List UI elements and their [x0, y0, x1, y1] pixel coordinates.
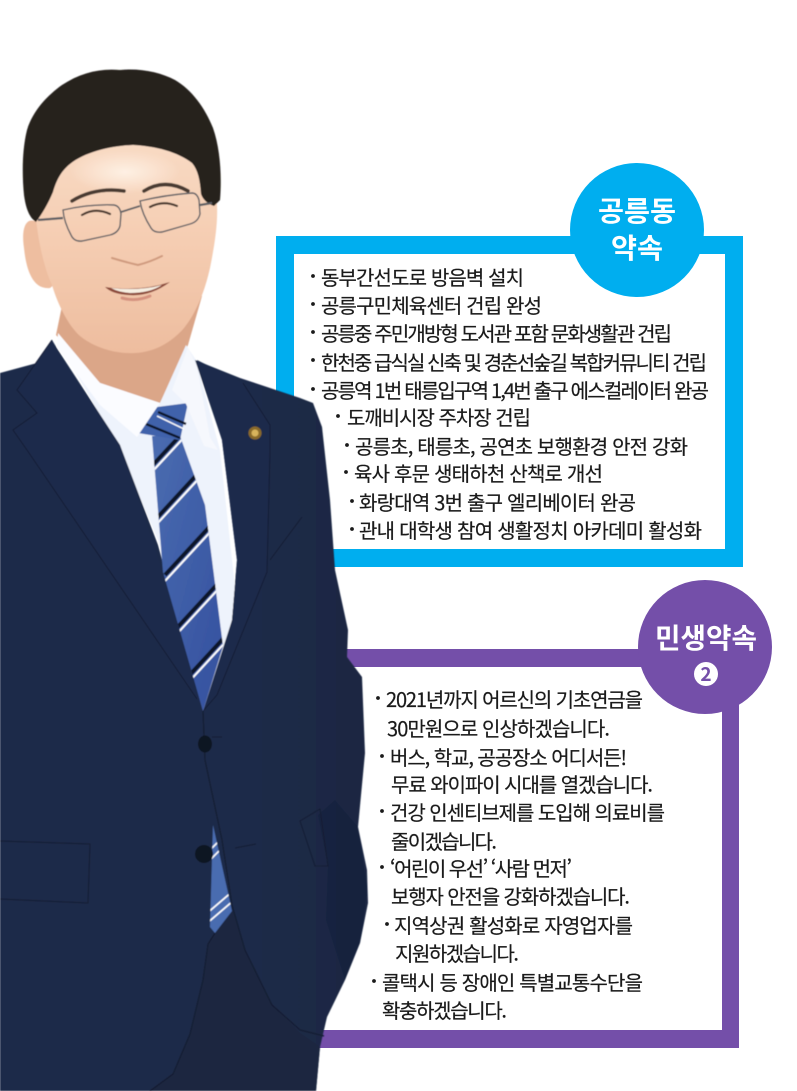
left ear	[23, 220, 60, 288]
lapel pin	[248, 426, 262, 440]
shirt	[60, 345, 237, 711]
forehead highlight	[70, 150, 180, 194]
text block: 공릉동 약속 list	[311, 262, 709, 544]
text block: 민생약속 list: ‘어린이 우선’ ‘사람 먼저’	[390, 853, 572, 882]
text block: 민생약속 list: 콜택시 등 장애인 특별교통수단을	[382, 967, 643, 996]
heading: 민생약속 2	[655, 617, 757, 687]
panel: blue frame	[276, 236, 743, 567]
text block: 민생약속 list: 확충하겠습니다.	[382, 995, 507, 1024]
heading: 공릉동 약속	[598, 190, 676, 267]
trousers	[150, 905, 320, 1091]
eyes	[82, 203, 177, 215]
shirt collar right	[172, 347, 218, 450]
text block: 공릉동 약속 list: 공릉구민체육센터 건립 완성	[321, 290, 542, 319]
text block: 공릉동 약속 list: 화랑대역 3번 출구 엘리베이터 완공	[359, 487, 636, 516]
text block: 공릉동 약속 list: 동부간선도로 방음벽 설치	[321, 262, 524, 291]
tie lower	[209, 826, 233, 934]
badge circle: 공릉동 약속	[570, 163, 704, 297]
mouth	[105, 282, 170, 300]
jacket buttons	[195, 736, 213, 863]
eyebrows	[72, 184, 188, 201]
heading: 공릉동 약속: 공릉동	[598, 190, 676, 230]
text block: 공릉동 약속 list: 도깨비시장 주차장 건립	[347, 402, 531, 431]
text block: 민생약속 list	[372, 684, 665, 1024]
left lapel	[13, 340, 203, 711]
text block: 공릉동 약속 list: 한천중 급식실 신축 및 경춘선숲길 복합커뮤니티 건립	[321, 347, 707, 376]
panel: purple frame	[310, 649, 739, 1048]
text block: 민생약속 list: 지원하겠습니다.	[395, 938, 519, 967]
suit jacket body	[0, 340, 368, 1091]
tie upper	[152, 435, 224, 711]
text block: 민생약속 list: 30만원으로 인상하겠습니다.	[387, 713, 610, 742]
text block: 민생약속 list: 보행자 안전을 강화하겠습니다.	[391, 881, 630, 910]
text block: 민생약속 list: 지역상권 활성화로 자영업자를	[394, 910, 633, 939]
text block: 민생약속 list: 무료 와이파이 시대를 열겠습니다.	[391, 769, 653, 798]
heading: 민생약속 2: 민생약속	[655, 617, 757, 657]
arm gap shadow	[318, 800, 367, 980]
text block: 공릉동 약속 list: 공릉초, 태릉초, 공연초 보행환경 안전 강화	[355, 431, 688, 460]
neck	[56, 296, 202, 403]
hair	[23, 69, 221, 222]
glasses	[38, 193, 212, 241]
text block: 공릉동 약속 list: 공릉역 1번 태릉입구역 1,4번 출구 에스컬레이터 완공	[321, 375, 709, 404]
jacket hem line	[150, 711, 324, 1091]
shirt collar left	[57, 333, 160, 437]
suit seams and pockets	[0, 517, 328, 903]
text block: 민생약속 list: 줄이겠습니다.	[391, 826, 497, 855]
portrait: man in navy suit	[0, 69, 368, 1091]
text block: 민생약속 list: 버스, 학교, 공공장소 어디서든!	[390, 742, 627, 771]
nose shadow	[112, 256, 162, 265]
text block: 공릉동 약속 list: 공릉중 주민개방형 도서관 포함 문화생활관 건립	[321, 318, 672, 347]
heading: 공릉동 약속: 약속	[611, 227, 663, 267]
text block: 공릉동 약속 list: 육사 후문 생태하천 산책로 개선	[354, 458, 603, 487]
right lapel	[197, 360, 270, 711]
badge circle: 민생약속	[638, 580, 772, 714]
text block: 민생약속 list: 2021년까지 어르신의 기초연금을	[386, 684, 643, 713]
tie knot	[138, 403, 188, 440]
face	[36, 130, 217, 353]
heading: 민생약속 2: 2	[700, 660, 712, 687]
text block: 공릉동 약속 list: 관내 대학생 참여 생활정치 아카데미 활성화	[359, 515, 702, 544]
text block: 민생약속 list: 건강 인센티브제를 도입해 의료비를	[390, 797, 665, 826]
